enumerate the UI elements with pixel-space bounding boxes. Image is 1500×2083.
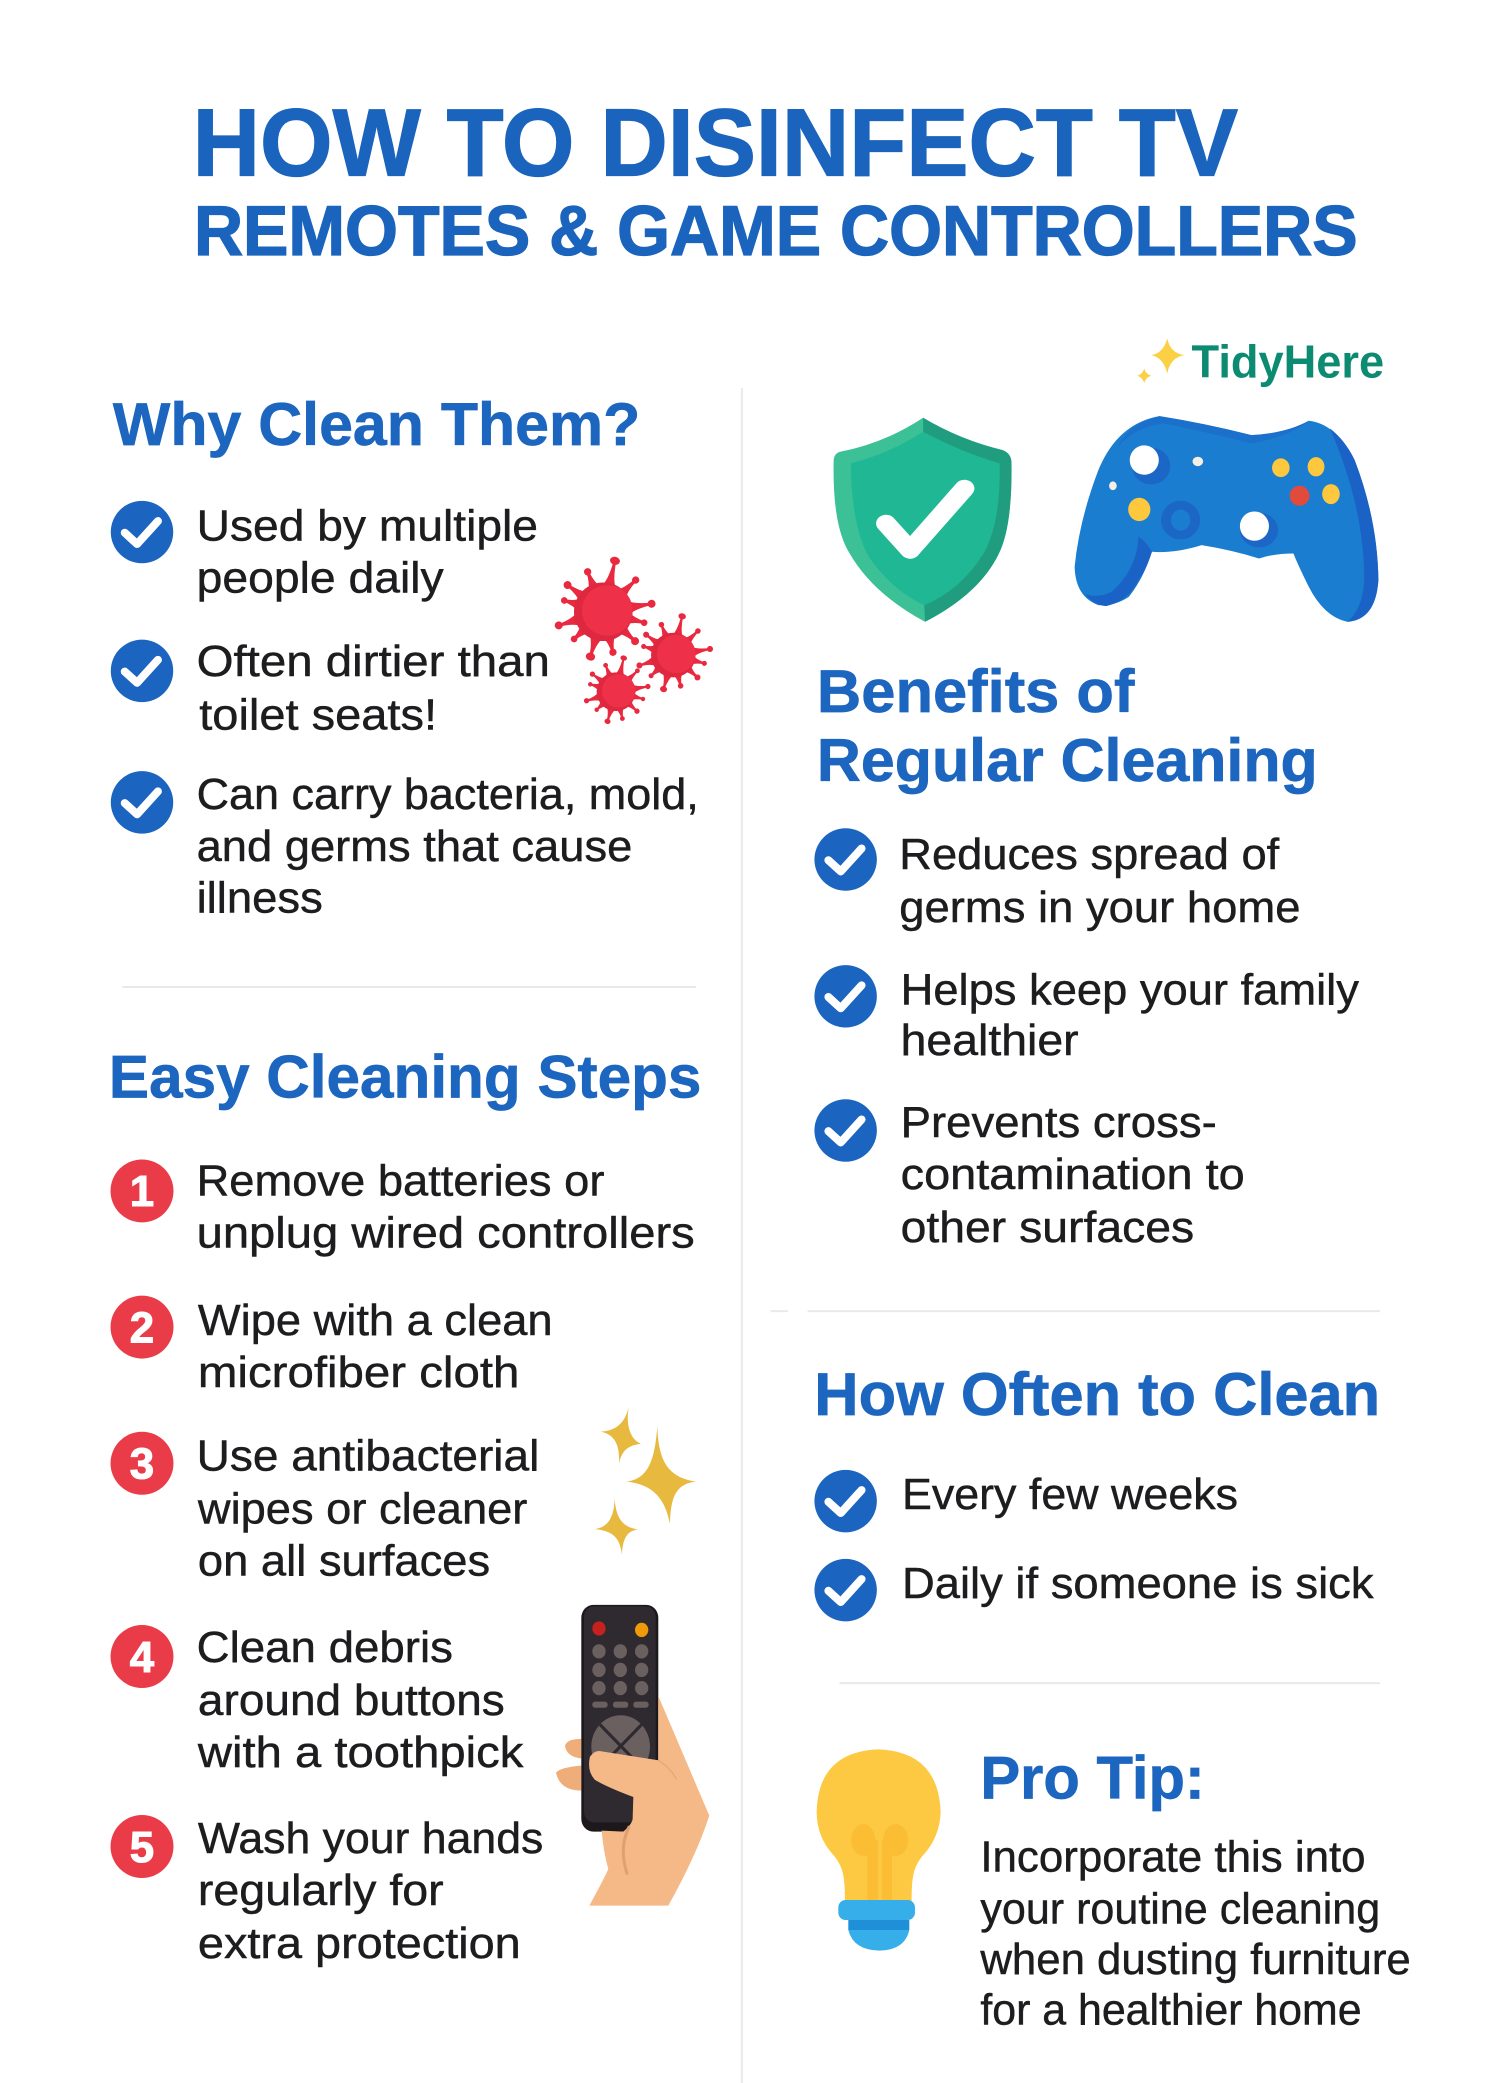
title — [193, 89, 1358, 270]
item: carry bacteria: illness — [197, 874, 323, 923]
panel: why clean them — [111, 390, 699, 923]
step 3: on all surfaces — [198, 1537, 490, 1586]
heading: benefits — [817, 657, 1318, 794]
step 5: 5 — [130, 1823, 154, 1872]
step 2: microfiber cloth — [198, 1348, 519, 1397]
section divider: left — [122, 986, 696, 988]
item: carry bacteria — [111, 770, 699, 923]
item: every few weeks: Every few weeks — [902, 1470, 1238, 1519]
step 5: regularly for — [198, 1866, 444, 1915]
step 4: Clean debris — [197, 1623, 453, 1672]
heading: benefits: Regular Cleaning — [817, 726, 1318, 794]
text: pro tip body: when dusting furniture — [979, 1935, 1411, 1984]
text: pro tip body: Incorporate this into — [980, 1833, 1366, 1882]
item: daily if sick — [814, 1559, 1374, 1621]
text: pro tip body: for a healthier home — [980, 1985, 1362, 2034]
step 4: with a toothpick — [197, 1728, 523, 1777]
heading: benefits: Benefits of — [817, 657, 1135, 725]
title: REMOTES & GAME CONTROLLERS — [194, 191, 1358, 270]
section divider: right upper — [770, 1310, 1380, 1312]
item: cross-contamination: contamination to — [901, 1150, 1245, 1199]
step 4: around buttons — [198, 1676, 505, 1725]
section divider: right lower — [840, 1682, 1380, 1684]
step 4 — [111, 1623, 523, 1777]
item: reduces spread: germs in your home — [899, 883, 1300, 932]
heading: pro tip: Pro Tip: — [980, 1744, 1205, 1812]
title: HOW TO DISINFECT TV — [193, 89, 1238, 196]
panel: how often to clean — [814, 1360, 1380, 1621]
step 2: 2 — [130, 1303, 154, 1352]
item: cross-contamination: Prevents cross- — [901, 1098, 1217, 1147]
panel: easy cleaning steps — [109, 1042, 701, 1968]
item: dirtier than toilet seats: Often dirtier than — [197, 637, 550, 686]
icon: germs — [553, 555, 714, 725]
step 4: 4 — [130, 1633, 155, 1682]
step 5 — [111, 1814, 543, 1968]
item: dirtier than toilet seats — [111, 637, 550, 739]
step 1: Remove batteries or — [197, 1157, 604, 1206]
item: daily if sick: Daily if someone is sick — [902, 1559, 1374, 1608]
item: every few weeks — [814, 1470, 1238, 1532]
icon: sparkles — [595, 1404, 696, 1555]
item: family healthier: Helps keep your family — [901, 965, 1359, 1014]
icon: game controller — [1075, 416, 1378, 622]
item: carry bacteria: and germs that cause — [197, 822, 632, 871]
step 3 — [111, 1432, 539, 1586]
item: family healthier — [814, 965, 1359, 1065]
item: cross-contamination — [814, 1098, 1245, 1252]
text: pro tip body — [979, 1833, 1411, 2034]
icon: shield with check — [834, 418, 1012, 622]
step 2 — [111, 1296, 553, 1397]
step 3: 3 — [130, 1440, 154, 1489]
item: family healthier: healthier — [901, 1016, 1079, 1065]
heading: why clean them: Why Clean Them? — [113, 390, 640, 458]
step 2: Wipe with a clean — [198, 1296, 553, 1345]
step 1: 1 — [130, 1167, 154, 1216]
heading: how often: How Often to Clean — [814, 1360, 1380, 1428]
step 3: Use antibacterial — [197, 1432, 539, 1481]
panel: pro tip — [979, 1744, 1411, 2034]
item: dirtier than toilet seats: toilet seats! — [199, 690, 437, 739]
icon: light bulb — [817, 1749, 941, 1951]
item: reduces spread: Reduces spread of — [899, 830, 1280, 879]
item: used by multiple people: Used by multiple — [197, 502, 538, 551]
text: pro tip body: your routine cleaning — [980, 1885, 1380, 1934]
step 3: wipes or cleaner — [197, 1485, 527, 1534]
heading: easy cleaning steps: Easy Cleaning Steps — [109, 1042, 701, 1110]
panel: benefits of regular cleaning — [814, 657, 1359, 1252]
logo: TidyHere: TidyHere — [1192, 335, 1384, 387]
column divider — [741, 388, 743, 2083]
step 1 — [111, 1157, 695, 1257]
step 5: Wash your hands — [198, 1814, 543, 1863]
item: used by multiple people: people daily — [197, 554, 444, 603]
item: reduces spread — [814, 828, 1300, 932]
icon: hand holding remote — [556, 1605, 709, 1906]
item: carry bacteria: Can carry bacteria, mold, — [197, 770, 699, 819]
step 5: extra protection — [198, 1919, 521, 1968]
item: used by multiple people — [111, 501, 538, 603]
step 1: unplug wired controllers — [197, 1208, 695, 1257]
item: cross-contamination: other surfaces — [901, 1203, 1194, 1252]
